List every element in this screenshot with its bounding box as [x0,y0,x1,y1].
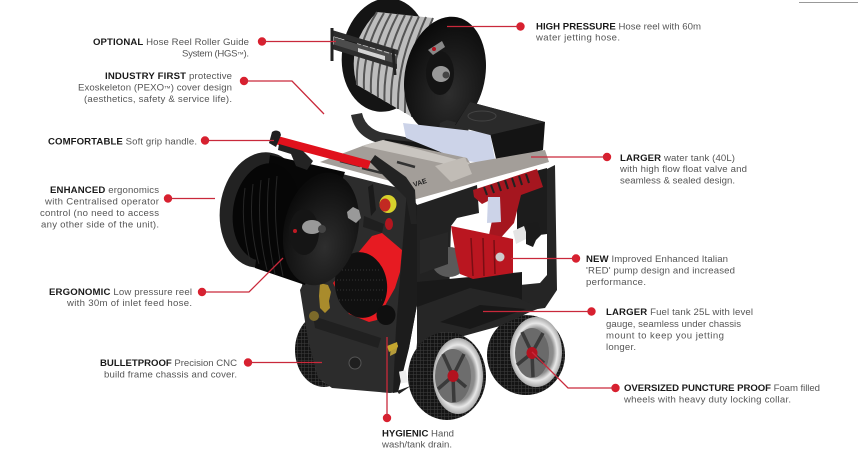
callout: enhanced: ENHANCED ergonomics [50,185,159,196]
callout: industry first [78,71,324,114]
callout: ergonomic: with 30m of inlet feed hose. [66,298,192,309]
front chassis plate [300,168,424,394]
roller guide [332,28,398,75]
low pressure reel [212,147,369,292]
back flange [334,0,436,117]
callout: high pressure [447,22,701,44]
callout: comfortable [48,136,274,148]
top reel assembly [334,0,496,163]
handle [269,130,417,224]
callout: high pressure: water jetting hose. [535,32,620,44]
callout: new pump: performance. [586,277,646,288]
callout: larger fuel tank: mount to keep you jetting [606,330,724,342]
callout: new pump: NEW Improved Enhanced Italian [586,254,728,265]
callout: comfortable: COMFORTABLE Soft grip handle. [48,136,197,148]
callout: larger water tank: LARGER water tank (40L) [620,153,735,164]
callout: larger fuel tank [483,307,753,353]
callout: oversized wheels: OVERSIZED PUNCTURE PROOF Foam filled [624,383,820,394]
red exoskeleton lattice [473,169,543,242]
callout: industry first: INDUSTRY FIRST protective [105,71,232,82]
callout: larger fuel tank: LARGER Fuel tank 25L with level [606,307,753,318]
callout: optional: System (HGS™). [182,48,249,60]
callout: larger water tank: seamless & sealed design. [620,176,735,186]
swivel [439,120,469,135]
water tank box [403,102,545,165]
callout: bulletproof: BULLETPROOF Precision CNC [100,358,237,369]
callout: larger water tank: with high flow float valve and [619,164,747,175]
control panel [347,184,396,233]
brass fitting [309,283,331,321]
reel stand tube [351,113,440,157]
callout: ergonomic [49,258,283,309]
callout: enhanced: with Centralised operator [44,196,160,208]
rear left wheel [295,313,353,387]
rear frame upright [417,165,557,320]
callout: high pressure: HIGH PRESSURE Hose reel with 60m [536,22,701,32]
callout: hygienic [381,337,454,449]
callout: oversized wheels: wheels with heavy duty locking collar. [623,394,791,406]
red pump [451,222,541,279]
brass drain tap [387,342,398,352]
callout: oversized wheels [532,352,820,406]
callout: ergonomic: ERGONOMIC Low pressure reel [49,287,192,298]
callout: new pump [511,254,735,288]
callout: larger water tank [531,153,747,186]
grey top deck [320,140,549,200]
top right speck [799,2,858,4]
callout: bulletproof [100,358,322,380]
callout: larger fuel tank: gauge, seamless under chassis [606,319,741,330]
engine cover [331,233,402,325]
callout: enhanced [40,185,215,230]
callout: bulletproof: build frame chassis and cover. [104,370,237,380]
rear right wheel [487,315,565,395]
callout: enhanced: any other side of the unit). [41,220,159,230]
callout: industry first: (aesthetics, safety & service life). [84,94,232,105]
callout: optional [93,37,336,60]
front flange [394,9,496,141]
machine illustration [212,0,565,420]
callout: larger fuel tank: longer. [606,342,636,353]
callout: hygienic: HYGIENIC Hand [382,428,454,440]
grey top deck: VAE [412,178,428,189]
fuel tank chassis [417,288,540,344]
grey hose drum [354,12,433,117]
front wheel [408,332,486,420]
callout: optional: OPTIONAL Hose Reel Roller Guide [93,37,249,48]
inner engine area [420,232,466,277]
callout: new pump: 'RED' pump design and increased [586,266,735,276]
callout: industry first: Exoskeleton (PEXO™) cover design [78,82,232,94]
callout: enhanced: control (no need to access [40,208,159,219]
